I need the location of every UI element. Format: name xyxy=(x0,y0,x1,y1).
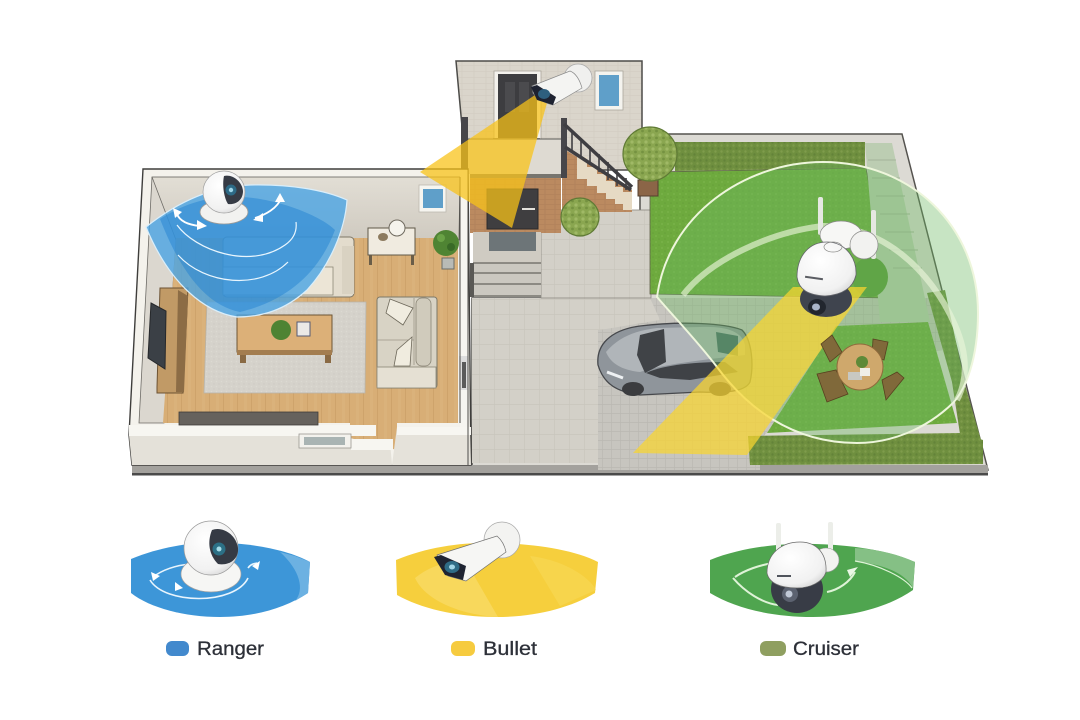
potted shrub xyxy=(623,127,677,196)
floor mat xyxy=(179,412,318,425)
bush on pad xyxy=(561,198,599,236)
back wall xyxy=(152,177,460,240)
legend: ranger: Ranger xyxy=(197,639,265,660)
porch slab xyxy=(468,139,562,174)
car xyxy=(598,323,752,396)
driveway pavers xyxy=(472,298,750,463)
legend: cruiser xyxy=(760,639,860,660)
side staircase xyxy=(561,118,632,212)
legend icon: ranger xyxy=(131,521,310,617)
legend: ranger xyxy=(166,639,265,660)
front steps xyxy=(470,263,541,297)
upper door xyxy=(493,71,541,154)
panel: site ground plan xyxy=(132,134,988,476)
wall window xyxy=(419,185,446,212)
legend icon: bullet xyxy=(396,522,598,617)
top hedge xyxy=(675,142,865,171)
landing and doormat xyxy=(473,232,541,264)
legend: bullet: Bullet xyxy=(483,639,538,660)
outer walls xyxy=(129,169,471,465)
left wall xyxy=(139,177,176,423)
coffee table xyxy=(237,315,332,363)
rug xyxy=(204,302,366,393)
patio furniture xyxy=(817,335,904,402)
bottom hedge xyxy=(748,433,983,465)
camera: bullet at entry xyxy=(531,64,592,105)
stepping path xyxy=(865,143,930,322)
legend: bullet xyxy=(451,639,538,660)
legend icon: cruiser xyxy=(710,522,915,617)
camera: ranger in room xyxy=(200,171,248,224)
right wall xyxy=(459,170,468,465)
camera: cruiser in garden xyxy=(797,197,878,317)
right hedge xyxy=(927,290,983,447)
TV stand xyxy=(157,288,188,393)
lower lawn xyxy=(767,322,957,433)
right sofa xyxy=(377,297,437,388)
lower door xyxy=(487,189,538,229)
concrete pad xyxy=(541,210,651,298)
shadow patch behind camera xyxy=(852,257,888,297)
arrowheads xyxy=(173,193,285,230)
coverage: yellow beam on driveway xyxy=(633,287,867,455)
coverage: bullet yellow cone xyxy=(420,95,547,228)
side table xyxy=(368,220,415,265)
coverage: cruiser green dome xyxy=(657,162,978,443)
television xyxy=(148,303,166,369)
wood floor xyxy=(163,238,458,450)
coverage: ranger blue fan xyxy=(146,185,347,317)
panel: garden lawn and hedges xyxy=(623,127,983,465)
brick front xyxy=(470,178,561,233)
main sofa xyxy=(223,237,354,297)
panel: living room xyxy=(129,169,471,465)
bottom wall and cap xyxy=(129,425,471,465)
panel: entry house xyxy=(456,61,651,298)
upper lawn xyxy=(650,168,890,298)
legend: cruiser: Cruiser xyxy=(793,639,860,660)
upper window xyxy=(595,71,623,110)
potted plant xyxy=(433,230,459,269)
